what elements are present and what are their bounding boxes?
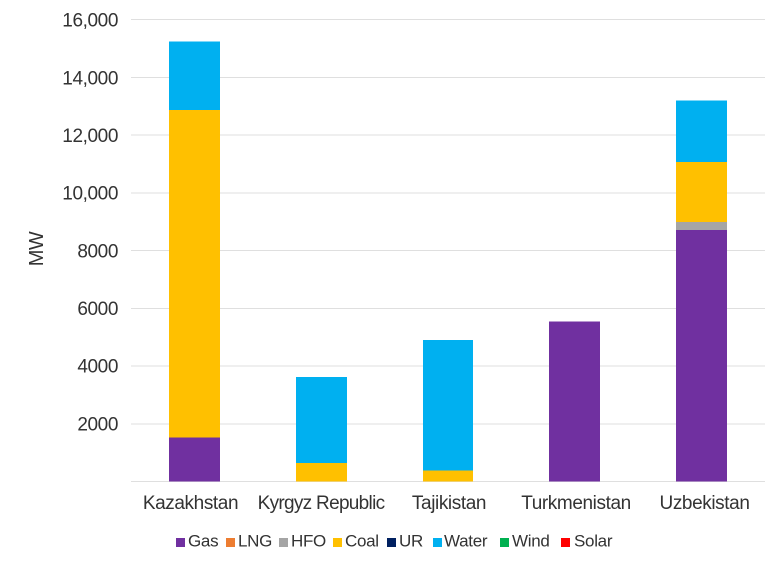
y axis labels [62,10,118,436]
legend: HFO [291,532,326,550]
y axis labels: 12,000 [62,126,118,147]
x axis labels: Turkmenistan [521,493,631,514]
x axis labels [143,493,750,514]
legend: Water [444,532,488,550]
y axis labels: 4000 [77,356,118,378]
legend: Coal [345,532,379,550]
legend [176,532,613,550]
y axis title: MW [26,231,48,266]
legend: Solar [574,532,613,550]
x axis labels: Tajikistan [412,493,486,514]
bar: Uzbekistan [676,100,727,482]
x axis labels: Uzbekistan [660,493,750,514]
bar: Turkmenistan [549,322,600,482]
y axis labels: 8000 [77,242,118,262]
bar: Kazakhstan [169,42,220,482]
x axis labels: Kyrgyz Republic [258,493,385,514]
bar: Tajikistan [423,340,473,482]
y axis labels: 16,000 [62,10,118,32]
x axis labels: Kazakhstan [143,493,238,514]
y axis labels: 2000 [77,414,118,436]
legend: Wind [512,532,550,550]
y axis labels: 10,000 [62,184,118,204]
legend: UR [399,532,423,550]
y axis labels: 14,000 [62,68,118,90]
legend: LNG [238,532,272,550]
y axis labels: 6000 [77,299,118,320]
bar: Kyrgyz Republic [296,377,347,482]
legend: Gas [188,532,218,550]
